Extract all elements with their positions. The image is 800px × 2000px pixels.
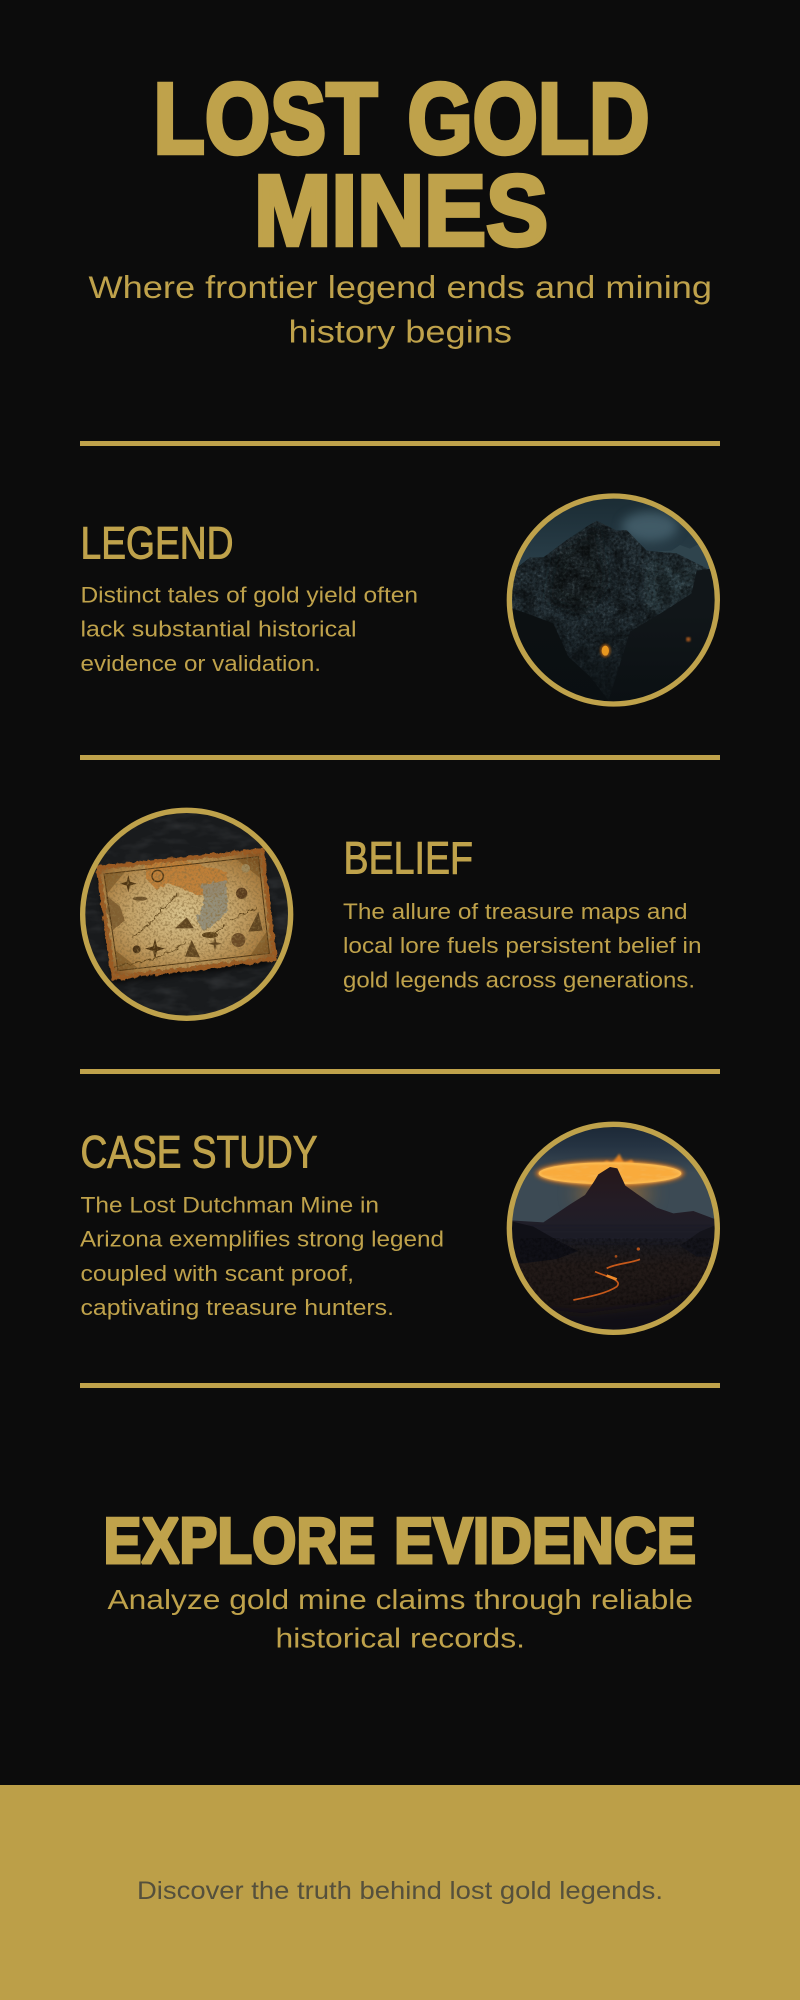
heading: belief: BELIEF bbox=[344, 832, 473, 884]
text block: case study bbox=[80, 1193, 444, 1320]
text block: case study: Arizona exemplifies strong legend bbox=[80, 1227, 444, 1252]
text block: belief bbox=[343, 899, 702, 992]
heading: call to action: EXPLORE bbox=[104, 1504, 376, 1577]
call to action text bbox=[108, 1584, 693, 1653]
footer band bbox=[0, 1785, 800, 2000]
text block: legend: evidence or validation. bbox=[80, 651, 321, 676]
text block: legend: lack substantial historical bbox=[80, 617, 356, 642]
text block: belief: The allure of treasure maps and bbox=[343, 899, 688, 924]
call to action text: Analyze gold mine claims through reliable bbox=[108, 1584, 693, 1615]
heading: call to action bbox=[104, 1504, 696, 1577]
panel: belief bbox=[80, 808, 702, 1022]
call to action text: historical records. bbox=[276, 1622, 525, 1653]
subtitle bbox=[88, 269, 712, 350]
image: mountain beneath ring of fire bbox=[507, 1122, 720, 1335]
text block: belief: local lore fuels persistent belief in bbox=[343, 933, 702, 958]
text block: case study: captivating treasure hunters. bbox=[80, 1295, 394, 1320]
panel: case study bbox=[80, 1122, 720, 1335]
text block: case study: The Lost Dutchman Mine in bbox=[80, 1193, 379, 1218]
land masses bbox=[145, 861, 227, 897]
footer text: Discover the truth behind lost gold legends. bbox=[137, 1877, 663, 1905]
text block: legend bbox=[80, 583, 418, 676]
image: dark mountain with mine glow bbox=[507, 493, 720, 707]
subtitle: Where frontier legend ends and mining bbox=[88, 269, 712, 305]
panel: legend bbox=[80, 493, 720, 707]
title: LOST bbox=[154, 63, 378, 175]
image: treasure map on slate bbox=[80, 808, 293, 1022]
subtitle: history begins bbox=[288, 314, 512, 350]
heading: legend: LEGEND bbox=[80, 518, 234, 568]
title bbox=[154, 63, 650, 267]
text block: belief: gold legends across generations. bbox=[343, 967, 695, 992]
heading: case study: CASE STUDY bbox=[80, 1126, 318, 1178]
title: GOLD bbox=[408, 63, 650, 175]
text block: legend: Distinct tales of gold yield often bbox=[80, 583, 418, 608]
text block: case study: coupled with scant proof, bbox=[80, 1261, 354, 1286]
heading: call to action: EVIDENCE bbox=[394, 1504, 696, 1577]
title: MINES bbox=[254, 155, 548, 267]
